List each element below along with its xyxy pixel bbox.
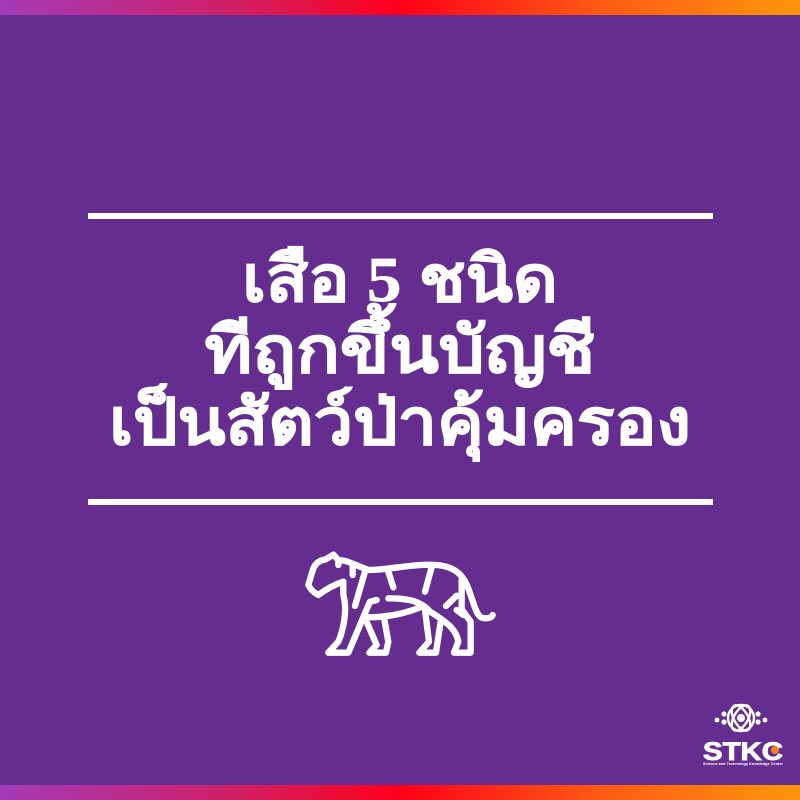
logo orange dot xyxy=(771,746,779,754)
title line 1: เสือ 5 ชนิด xyxy=(242,244,558,315)
logo tagline: Science and Technology Knowledge Center xyxy=(703,761,783,766)
lower rule xyxy=(88,499,713,505)
title line 2: ทีถูกขึ้นบัญชี xyxy=(205,315,595,386)
bottom gradient bar xyxy=(0,785,800,800)
upper rule xyxy=(88,213,713,219)
title xyxy=(109,244,691,462)
logo emblem xyxy=(715,702,767,734)
top gradient bar xyxy=(0,0,800,15)
title line 3: เป็นสัตว์ป่าคุ้มครอง xyxy=(109,387,691,458)
logo wordmark: STKC xyxy=(703,738,783,766)
